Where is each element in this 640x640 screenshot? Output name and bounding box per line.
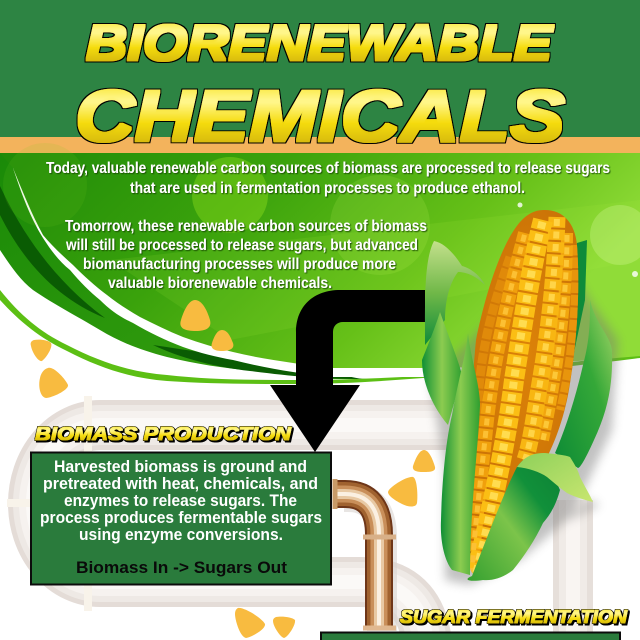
- intro text: valuable biorenewable chemicals.: [108, 275, 332, 292]
- corn kernels scattered: [31, 300, 435, 638]
- panel: biomass production: [31, 452, 331, 584]
- cob: [470, 210, 578, 574]
- intro text: will still be processed to release sugars, but advanced: [65, 237, 418, 254]
- right husk: [555, 300, 612, 468]
- panel: biomass production: using enzyme conversions.: [79, 526, 283, 544]
- intro text: that are used in fermentation processes to produce ethanol.: [130, 180, 525, 197]
- panel: biomass production: process produces fermentable sugars: [40, 509, 322, 527]
- title: [75, 15, 565, 157]
- panel: sugar fermentation: [321, 632, 620, 640]
- panel: biomass production: Biomass In -> Sugars Out: [76, 558, 287, 577]
- corn shadow: [430, 250, 618, 585]
- heading: sugar fermentation: SUGAR FERMENTATION: [400, 607, 628, 627]
- black arrow: [270, 290, 425, 452]
- orange stripe: [0, 137, 640, 153]
- header band: [0, 0, 640, 137]
- left front husk: [441, 333, 480, 575]
- intro text: [46, 160, 610, 292]
- white pipes: [7, 396, 573, 640]
- back left husk: [422, 241, 485, 425]
- panel: biomass production: enzymes to release sugars. The: [64, 492, 297, 510]
- panel: biomass production: pretreated with heat, chemicals, and: [43, 475, 318, 493]
- title: CHEMICALS: [75, 77, 565, 157]
- intro text: biomanufacturing processes will produce more: [83, 256, 396, 273]
- back right husk: [568, 240, 587, 362]
- folded husk tip: [517, 453, 593, 502]
- front bottom husk: [468, 456, 560, 581]
- intro text: Tomorrow, these renewable carbon sources of biomass: [65, 218, 427, 235]
- title: BIORENEWABLE: [86, 15, 554, 71]
- green swoosh background: [0, 143, 640, 384]
- panel: biomass production: Harvested biomass is ground and: [54, 458, 307, 476]
- corn cob illustration: [422, 200, 618, 585]
- heading: biomass production: BIOMASS PRODUCTION: [35, 424, 292, 444]
- copper pipe: [335, 479, 396, 631]
